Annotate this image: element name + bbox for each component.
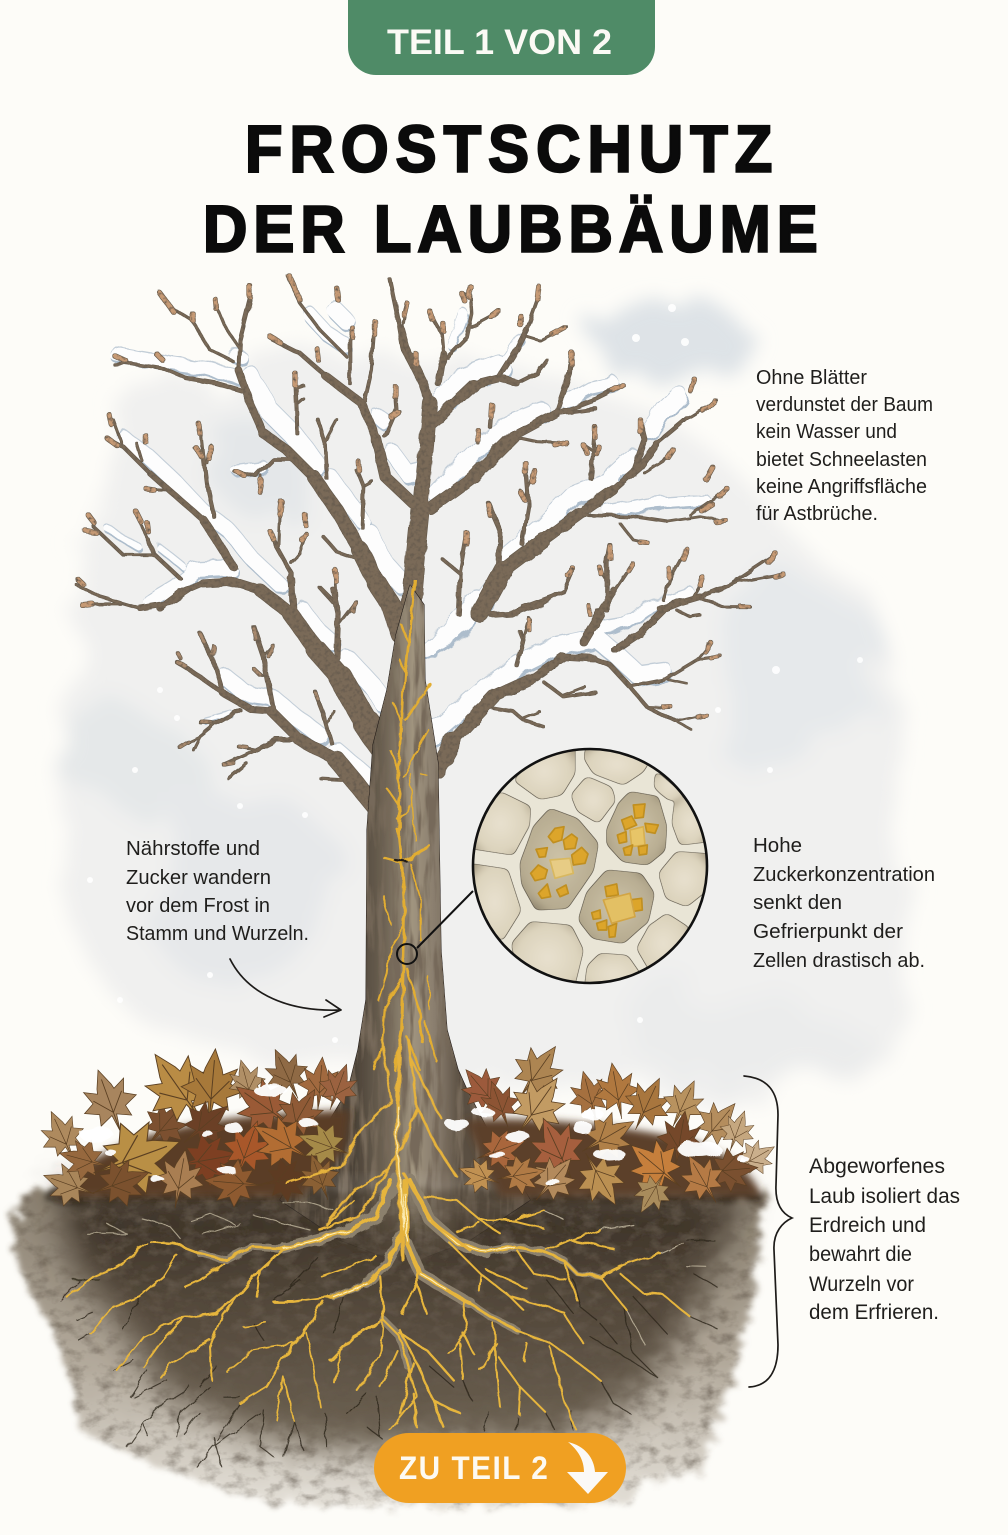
text: leaf insulation [809,1154,960,1324]
text: sugar: senkt den [753,891,842,914]
leaf litter layer [31,1032,783,1222]
title: FROSTSCHUTZ [245,111,772,186]
title: DER LAUBBÄUME [203,191,818,266]
leaves, right pile [450,1032,783,1222]
right crown [402,285,783,613]
golden roots [67,1180,417,1430]
text: sugar [753,834,935,972]
golden sap veins in trunk and crown [375,460,435,1070]
buds, right crown [404,286,783,585]
magnifier rim [473,749,707,983]
header tab: part 1 of 2 [348,0,655,75]
golden veins at trunk base [287,1040,470,1260]
lower left branches [160,580,460,820]
text: no leaves: keine Angriffsfläche [756,475,927,498]
text: nutrients: Stamm und Wurzeln. [126,922,309,945]
text: no leaves: für Astbrüche. [756,502,878,525]
right roots [400,1180,717,1430]
buds, lower left [177,603,356,765]
text: sugar: Zuckerkonzentration [753,863,935,886]
buds, lower right [529,606,748,717]
text: nutrients: vor dem Frost in [126,894,270,917]
golden roots [400,1180,690,1430]
snow on branches [107,309,706,779]
lower right branch [437,590,750,770]
dark fine roots [430,1240,717,1430]
text: leaf insulation: bewahrt die [809,1242,912,1266]
text: leaf insulation: Erdreich und [809,1213,926,1237]
text: no leaves: verdunstet der Baum [756,393,933,416]
text: leaf insulation: Abgeworfenes [809,1154,945,1178]
arrow: text to trunk [230,959,341,1017]
text: nutrients: Zucker wandern [126,866,271,889]
tree [77,275,783,1265]
text: no leaves: bietet Schneelasten [756,448,927,471]
root sheaths [200,1180,408,1367]
text: leaf insulation: Laub isoliert das [809,1184,960,1208]
sugar crystals [531,804,658,937]
text: sugar: Hohe [753,834,802,857]
snowflake dots [87,304,863,1043]
left crown [77,275,418,610]
root sheaths [407,1180,600,1330]
dark fine roots [60,1257,383,1467]
text: leaf insulation: dem Erfrieren. [809,1300,939,1324]
buds, left crown [78,275,416,604]
text: no leaves: Ohne Blätter [756,366,867,389]
pale side roots [87,1202,333,1240]
cell walls and cells [474,750,706,982]
pale side roots [543,1210,707,1345]
icon: curved down arrow [567,1442,608,1494]
button: to part 2 [374,1433,626,1503]
header tab: part 1 of 2: TEIL 1 VON 2 [387,23,612,62]
snow flecks on leaves [80,1084,748,1186]
text: sugar: Gefrierpunkt der [753,920,903,943]
text: no leaves [756,366,933,525]
text: sugar: Zellen drastisch ab. [753,949,925,972]
root system with golden sap [60,1040,717,1467]
text: no leaves: kein Wasser und [756,420,897,443]
leaf pile base [55,1110,762,1197]
text: leaf insulation: Wurzeln vor [809,1272,914,1296]
button: to part 2: ZU TEIL 2 [399,1450,548,1486]
curly brace [744,1076,792,1387]
branches [77,275,783,820]
left roots [60,1180,417,1467]
trunk [280,585,530,1265]
soil cross-section [10,1190,770,1508]
title [203,111,818,266]
magnified cell view [474,750,706,982]
leaves, left pile [31,1035,365,1216]
magnifier marker and leader line [397,891,473,964]
watercolor winter sky wash [60,295,905,1090]
text: nutrients: Nährstoffe und [126,837,260,860]
text: nutrients [126,837,309,945]
